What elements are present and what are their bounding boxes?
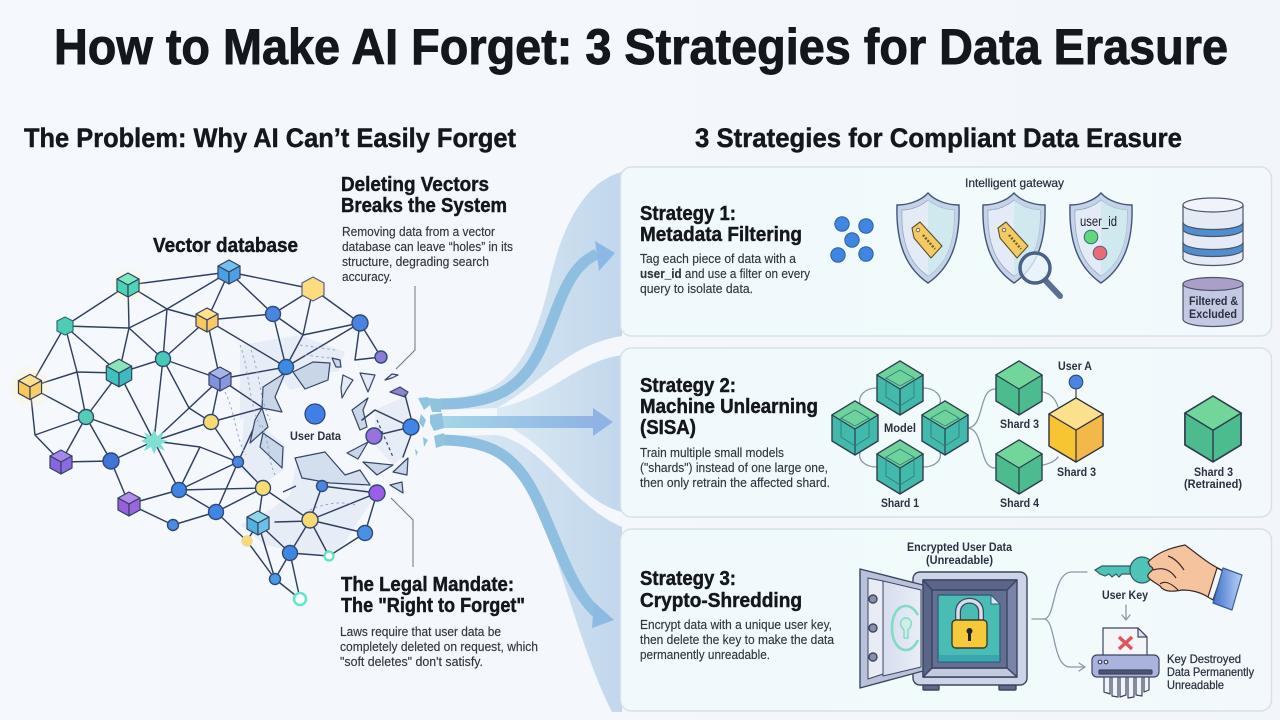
heading: the problem: The Problem: Why AI Can’t Easily Forget [24,123,516,153]
title: How to Make AI Forget: 3 Strategies for Data Erasure [54,19,1228,75]
icon: key [1095,557,1154,583]
callout: legal mandate: "soft deletes" don't satisfy. [340,654,483,669]
callout: deleting vectors: database can leave “holes” in its [342,239,513,254]
icon: shield with tag [897,193,959,283]
description: then only retrain the affected shard. [640,475,830,490]
description [640,445,830,490]
icon: shield with status [1070,193,1132,283]
encrypted document [938,595,1000,662]
icon: safe [860,569,1027,690]
shard cube 3 [996,361,1042,431]
icon: filtered and excluded cylinder [1183,278,1243,326]
heading: Crypto-Shredding [640,590,802,612]
callout: deleting vectors [341,174,513,284]
arrow: to strategy 2 [440,408,613,436]
label: key destroyed: Key Destroyed [1167,652,1241,666]
description: Train multiple small models [640,445,784,460]
arrow: key to shredder [1122,605,1130,620]
heading: Strategy 3: [640,568,736,590]
label: intelligent gateway: Intelligent gateway [965,176,1064,190]
callout: deleting vectors: Removing data from a vector [342,224,496,239]
model cubes: Shard 1 [881,498,920,510]
label: encrypted user data [907,542,1013,567]
callout: deleting vectors: accuracy. [342,269,392,284]
description [640,617,835,662]
label: encrypted user data: (Unreadable) [926,555,993,567]
callout: deleting vectors: structure, degrading search [342,254,489,269]
callout: legal mandate: The "Right to Forget" [341,595,525,617]
icon: filtered and excluded cylinder: Filtered & [1189,296,1238,308]
description [640,251,810,296]
shard cube 3: Shard 3 [1000,419,1039,431]
cube nodes [218,260,240,284]
heading [640,568,802,612]
open door [860,569,923,688]
leader line: legal mandate [391,498,413,567]
label: user key: User Key [1102,590,1149,602]
callout: legal mandate: The Legal Mandate: [341,574,514,596]
icon: user data point [290,404,342,443]
label: key destroyed: Data Permanently [1167,665,1254,679]
burst node [141,429,168,454]
retrained shard: Shard 3 [1194,467,1233,479]
description: Tag each piece of data with a [640,251,797,266]
data flakes at arrow origin [415,397,445,456]
description: permanently unreadable. [640,647,770,662]
callout: legal mandate: completely deleted on request, which [340,639,538,654]
model cubes [832,361,968,510]
description: user_id and use a filter on every [640,266,810,281]
icon: data points [831,217,873,262]
icon: shredder [1092,628,1159,698]
retrained shard: (Retrained) [1184,479,1242,491]
glows [8,365,52,409]
icon: hand [1148,545,1242,610]
arrow: to strategy 1 [440,241,615,404]
icon: user data point: User Data [290,431,342,443]
flow bands from database to strategy panels [442,172,622,712]
label: key destroyed: Unreadable [1167,678,1224,692]
teal rings [324,552,334,560]
icon: shield with status: user_id [1080,214,1117,229]
connectors [860,388,1058,468]
shard cube 4 [996,440,1042,510]
retrained shard [1184,396,1242,491]
label: key destroyed [1167,652,1254,692]
connector arrowhead [1079,663,1085,671]
vector database network [8,260,419,605]
icon: database [1183,198,1243,266]
mesh edges [30,272,381,599]
panel: strategy 1 [620,167,1272,336]
hole fragments [250,358,408,493]
callout: deleting vectors: Deleting Vectors [341,174,489,196]
description: ("shards") instead of one large one, [640,460,828,475]
hex nodes [302,277,324,301]
pale shattered mesh [240,335,411,555]
affected yellow shard: Shard 3 [1057,467,1096,479]
heading line two: Metadata Filtering [640,224,802,246]
heading: strategies: 3 Strategies for Compliant Data Erasure [695,123,1182,153]
heading: Strategy 1: [640,203,736,225]
panel: strategy 2 [620,348,1272,517]
leader line: deleting vectors [396,286,415,369]
callout: legal mandate: Laws require that user data be [340,624,501,639]
connector brace [1032,572,1087,667]
icon: shield with magnifier [983,193,1060,296]
heading: (SISA) [640,417,696,439]
shard cube 4: Shard 4 [1000,498,1040,510]
label: vector database: Vector database [153,235,298,257]
heading: Machine Unlearning [640,396,818,418]
callout: legal mandate [340,574,538,669]
heading: Strategy 2: [640,375,736,397]
description: query to isolate data. [640,281,753,296]
heading [640,375,818,439]
arrow: to strategy 3 [440,440,614,628]
padlock [952,601,987,648]
affected yellow shard [1049,361,1103,479]
label: encrypted user data: Encrypted User Data [907,542,1013,554]
model cubes: Model [884,423,916,435]
panel: strategy 3 [620,529,1272,711]
callout: deleting vectors: Breaks the System [341,195,507,217]
affected yellow shard: User A [1058,361,1092,373]
description: then delete the key to make the data [640,632,835,647]
icon: filtered and excluded cylinder: Excluded [1189,309,1237,321]
circle nodes [78,306,419,584]
description: Encrypt data with a unique user key, [640,617,832,632]
